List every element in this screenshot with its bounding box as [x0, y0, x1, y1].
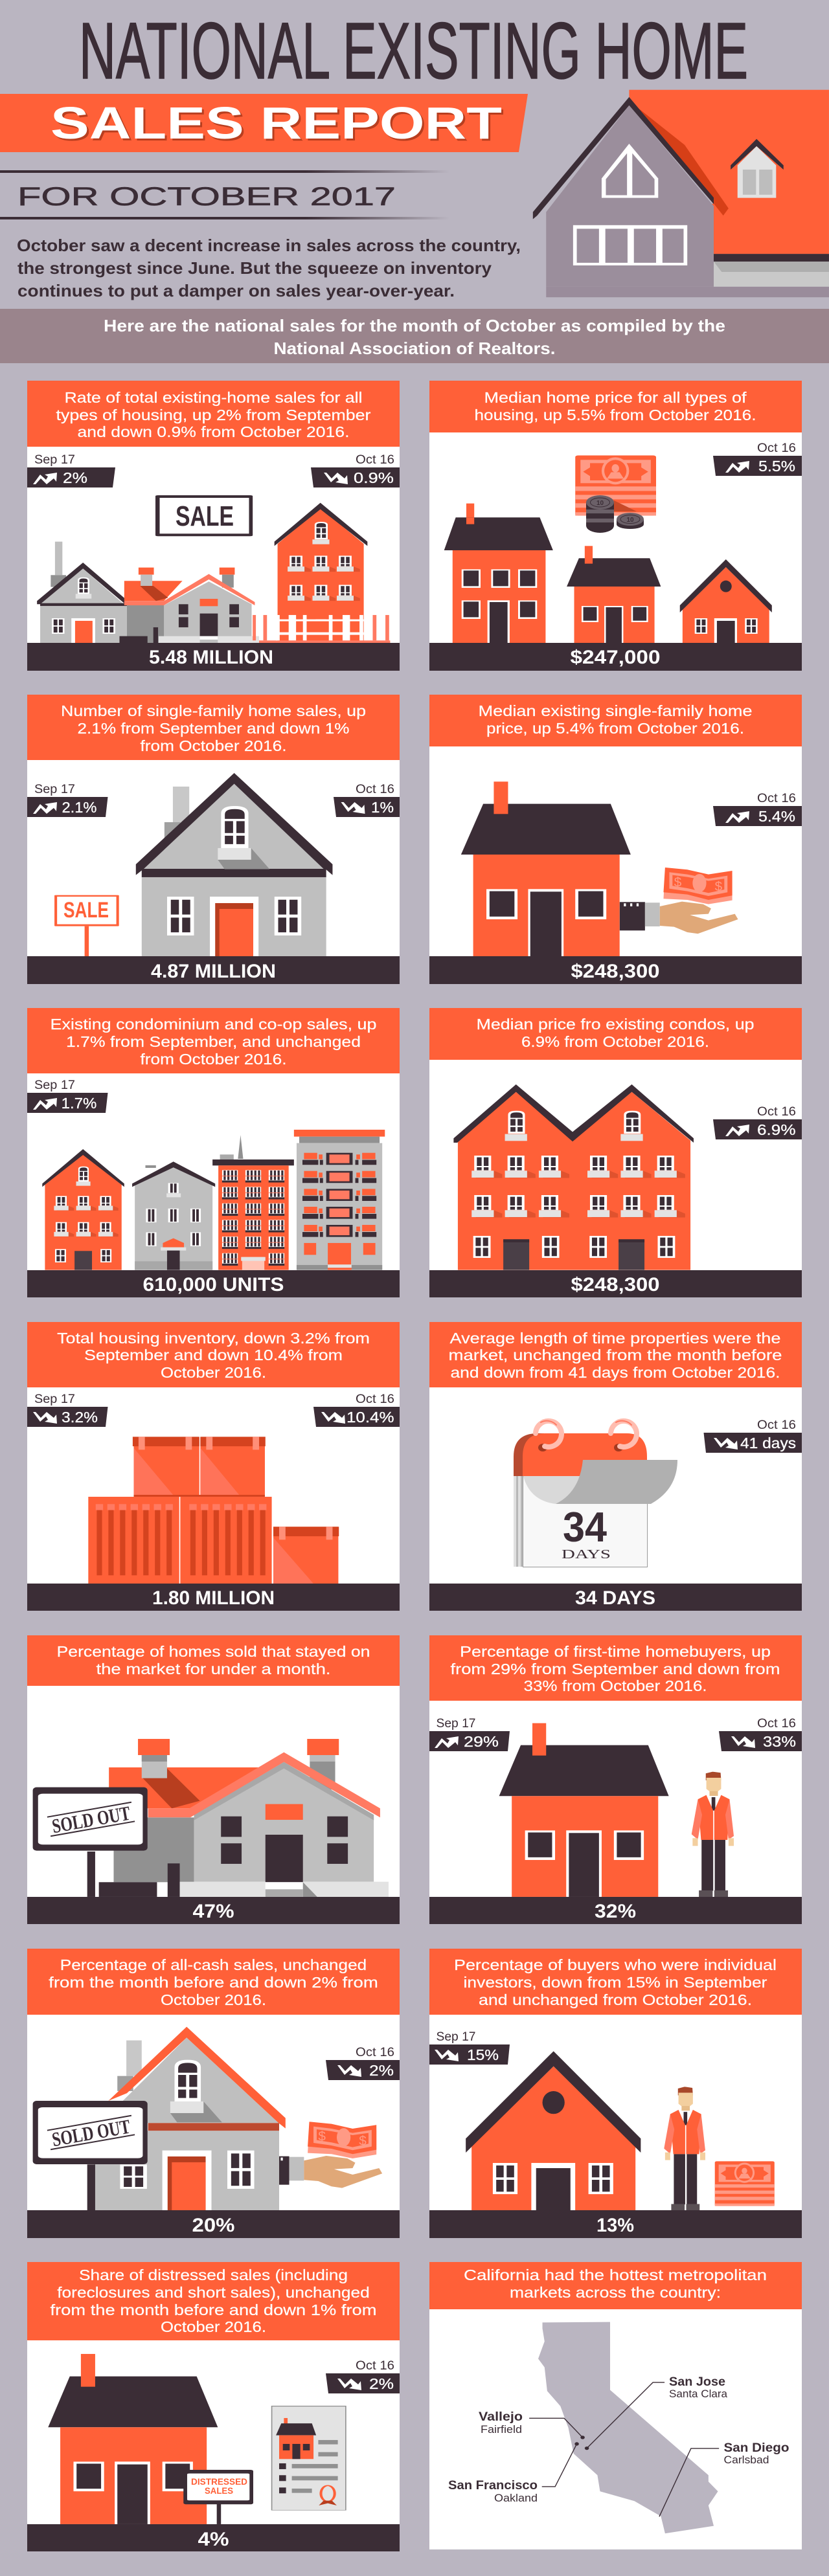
illustration: sold house and cash — [33, 2027, 382, 2211]
panel heading — [27, 695, 400, 760]
value bar: $247,000 — [570, 647, 661, 668]
panel heading: California had the hottest metropolitan — [464, 2267, 767, 2283]
value bar — [27, 2524, 400, 2551]
badge: Oct 16 down 2% — [326, 2046, 400, 2080]
badge: Sep 17 up 2%: Sep 17 — [34, 453, 75, 467]
badge: Sep 17 up 1.7%: 1.7% — [62, 1095, 97, 1112]
badge: Sep 17 down 3.2% — [27, 1393, 108, 1427]
panel heading — [27, 2262, 400, 2340]
panel: median home price — [429, 381, 802, 671]
map label: San Diego: Carlsbad — [724, 2454, 769, 2466]
panel heading — [429, 1008, 802, 1060]
intro band: National Association of Realtors. — [273, 339, 556, 358]
badge: Oct 16 down 33%: Oct 16 — [757, 1717, 796, 1730]
badge: Sep 17 down 3.2%: Sep 17 — [34, 1393, 75, 1406]
panel heading: Number of single-family home sales, up — [61, 702, 366, 719]
badge: Oct 16 up 6.9%: Oct 16 — [757, 1105, 796, 1119]
intro paragraph: continues to put a damper on sales year-over-year. — [17, 281, 455, 300]
badge: Sep 17 down 15%: 15% — [467, 2046, 499, 2063]
map label: Vallejo: Fairfield — [481, 2423, 522, 2436]
sign text: distressed sales: SALES — [205, 2485, 233, 2496]
panel heading: September and down 10.4% from — [84, 1347, 343, 1363]
intro paragraph: the strongest since June. But the squeeze on inventory — [17, 258, 492, 278]
map label: San Diego: San Diego — [724, 2441, 789, 2455]
panel heading: from October 2016. — [140, 1051, 286, 1068]
panel heading: Existing condominium and co-op sales, up — [51, 1016, 377, 1033]
panel heading: price, up 5.4% from October 2016. — [486, 720, 744, 737]
value bar — [429, 956, 802, 984]
badge: Oct 16 down 41 days — [703, 1418, 802, 1453]
value bar — [27, 643, 400, 671]
panel: total housing inventory — [27, 1322, 400, 1611]
panel: median condo price — [429, 1008, 802, 1297]
value bar: 47% — [193, 1901, 234, 1922]
panel heading: October 2016. — [161, 1364, 266, 1381]
illustration: house with sold out sign — [33, 1739, 389, 1897]
panel heading: October 2016. — [161, 2318, 266, 2335]
panel heading — [27, 1949, 400, 2015]
badge: Oct 16 down 33% — [719, 1717, 802, 1751]
panel heading: October 2016. — [161, 1991, 266, 2008]
panel heading: Percentage of homes sold that stayed on — [57, 1643, 370, 1660]
badge: Oct 16 down 41 days: 41 days — [740, 1435, 796, 1451]
panel: total existing-home sales — [27, 381, 400, 671]
panel heading: from October 2016. — [140, 737, 286, 754]
panel heading: and unchanged from October 2016. — [479, 1991, 752, 2008]
value bar: 610,000 UNITS — [142, 1274, 284, 1295]
panel heading: 2.1% from September and down 1% — [78, 720, 350, 737]
illustration: twin-gabled condo — [453, 1084, 694, 1270]
illustration: grey house with sale sign — [54, 773, 332, 956]
value bar: 34 DAYS — [575, 1587, 655, 1609]
badge: Oct 16 up 5.5%: Oct 16 — [757, 442, 796, 455]
map label: San Jose: San Jose — [669, 2375, 725, 2389]
panel heading — [27, 1008, 400, 1073]
sign text: sale: SALE — [63, 898, 109, 923]
panel heading: Total housing inventory, down 3.2% from — [57, 1330, 370, 1347]
illustration: stacked crates — [88, 1437, 339, 1584]
value bar: 13% — [596, 2215, 634, 2236]
panel heading: Percentage of first-time homebuyers, up — [460, 1643, 771, 1660]
value bar: 20% — [192, 2215, 234, 2236]
value bar — [27, 2210, 400, 2238]
panel heading: Median home price for all types of — [484, 389, 747, 406]
panel: all-cash sales — [27, 1949, 400, 2238]
illustration: three houses and money — [444, 455, 772, 643]
value bar — [429, 1584, 802, 1611]
value bar: $248,300 — [571, 961, 659, 982]
value bar: 5.48 MILLION — [149, 647, 273, 668]
sign text: sold out: SOLD OUT — [50, 1802, 132, 1837]
badge: Sep 17 up 29% — [429, 1717, 510, 1751]
panel heading: and down 0.9% from October 2016. — [78, 423, 350, 440]
badge: Sep 17 up 2.1%: Sep 17 — [34, 783, 75, 796]
icon: coins: 10 — [596, 500, 604, 507]
panel heading — [429, 695, 802, 746]
illustration: house, distressed sign and document — [48, 2354, 346, 2524]
badge: Sep 17 up 29%: Sep 17 — [437, 1717, 475, 1730]
badge: Oct 16 down 33%: 33% — [763, 1733, 796, 1750]
panel heading: investors, down from 15% in September — [464, 1974, 767, 1991]
panel heading — [27, 381, 400, 447]
panel: median single-family price — [429, 695, 802, 984]
value bar — [429, 643, 802, 671]
badge: Oct 16 up 6.9%: 6.9% — [757, 1121, 796, 1138]
badge: Oct 16 down 2%: Oct 16 — [356, 2359, 394, 2373]
subtitle: for October 2017 — [0, 170, 449, 219]
badge: Sep 17 up 2.1% — [27, 783, 108, 817]
intro paragraph: October saw a decent increase in sales across the country, — [17, 236, 521, 255]
subtitle: for October 2017: FOR OCTOBER 2017 — [17, 183, 396, 211]
badge: Oct 16 down 10.4%: Oct 16 — [356, 1393, 394, 1406]
panel heading: Median price fro existing condos, up — [477, 1016, 754, 1033]
panel: single-family home sales — [27, 695, 400, 984]
value bar — [27, 1270, 400, 1297]
value bar — [27, 956, 400, 984]
intro band — [0, 309, 829, 363]
panel heading: Percentage of buyers who were individual — [454, 1956, 777, 1973]
panel: homes sold under a month — [27, 1635, 400, 1924]
badge: Oct 16 down 0.9% — [311, 453, 400, 487]
panel heading: Rate of total existing-home sales for all — [65, 389, 363, 406]
panel heading: from the month before and down 2% from — [49, 1974, 378, 1991]
intro paragraph — [17, 236, 521, 300]
value bar — [27, 1897, 400, 1924]
badge: Sep 17 up 2% — [27, 453, 115, 487]
badge: Oct 16 down 1%: 1% — [371, 799, 394, 816]
banner: sales report — [0, 94, 528, 152]
badge: Sep 17 up 2%: 2% — [63, 469, 87, 486]
badge: Oct 16 down 2%: 2% — [369, 2375, 394, 2392]
value bar: $248,300 — [571, 1274, 659, 1295]
badge: Oct 16 down 1% — [334, 783, 400, 817]
badge: Oct 16 up 5.4% — [713, 792, 802, 826]
value bar: 4% — [198, 2529, 229, 2550]
map label: San Francisco: San Francisco — [448, 2479, 538, 2492]
panel heading: Percentage of all-cash sales, unchanged — [60, 1956, 367, 1973]
panel heading — [27, 1635, 400, 1686]
badge: Oct 16 down 1%: Oct 16 — [356, 783, 394, 796]
illustration: row of houses — [37, 495, 390, 643]
icon: coins — [586, 495, 644, 533]
badge: Oct 16 down 0.9%: Oct 16 — [356, 453, 394, 467]
panel heading: 6.9% from October 2016. — [521, 1033, 709, 1050]
panel heading: 1.7% from September, and unchanged — [66, 1033, 361, 1050]
panel heading: 33% from October 2016. — [523, 1677, 707, 1694]
panel heading — [429, 1949, 802, 2015]
badge: Sep 17 down 15% — [429, 2030, 510, 2065]
badge: Oct 16 up 5.5%: 5.5% — [758, 458, 795, 475]
sign text: distressed sales — [191, 2476, 247, 2496]
panel heading — [429, 1635, 802, 1701]
value bar — [27, 1584, 400, 1611]
map label: San Jose — [669, 2375, 728, 2400]
badge: Sep 17 up 1.7% — [27, 1079, 108, 1113]
panel heading: the market for under a month. — [96, 1661, 330, 1677]
value bar: 1.80 MILLION — [152, 1587, 275, 1609]
header section — [0, 7, 829, 363]
badge: Oct 16 down 2%: Oct 16 — [356, 2046, 394, 2059]
badge: Oct 16 up 5.5% — [713, 442, 802, 476]
panel: condo and co-op sales — [27, 1008, 400, 1297]
badge: Sep 17 up 1.7%: Sep 17 — [34, 1079, 75, 1092]
map label: San Francisco — [448, 2479, 538, 2504]
panel heading: Average length of time properties were the — [449, 1330, 781, 1347]
panel heading: housing, up 5.5% from October 2016. — [474, 407, 756, 423]
map label: San Francisco: Oakland — [494, 2492, 538, 2504]
panel heading: markets across the country: — [510, 2284, 721, 2301]
panel heading: market, unchanged from the month before — [448, 1347, 782, 1363]
sign text: sold out: SOLD OUT — [50, 2115, 132, 2151]
badge: Sep 17 down 15%: Sep 17 — [437, 2030, 475, 2044]
banner: sales report: SALES REPORT — [51, 98, 502, 148]
badge: Oct 16 up 5.4%: 5.4% — [758, 808, 795, 825]
sign text: sale: SALE — [176, 500, 234, 532]
intro band: Here are the national sales for the month of October as compiled by the — [104, 316, 725, 335]
illustration: condo buildings — [42, 1130, 385, 1270]
panel heading: from 29% from September and down from — [451, 1661, 780, 1677]
illustration: house, investor and cash — [466, 2051, 775, 2211]
value bar: 4.87 MILLION — [151, 961, 276, 982]
illustration: hero house — [533, 90, 829, 297]
value bar — [429, 1897, 802, 1924]
value bar: 32% — [595, 1901, 636, 1922]
badge: Oct 16 down 0.9%: 0.9% — [354, 469, 394, 486]
illustration: calendar: 34 — [563, 1503, 607, 1551]
illustration: calendar — [514, 1421, 677, 1567]
panel heading — [429, 1322, 802, 1387]
panel: California metropolitan markets — [429, 2262, 802, 2549]
illustration: house and buyer — [499, 1723, 734, 1898]
panel: individual investors — [429, 1949, 802, 2238]
badge: Oct 16 down 2% — [326, 2359, 400, 2393]
panel heading — [429, 2262, 802, 2309]
panel heading: foreclosures and short sales), unchanged — [57, 2284, 370, 2301]
map label: San Jose: Santa Clara — [669, 2388, 728, 2400]
sign text: distressed sales: DISTRESSED — [191, 2476, 247, 2487]
badge: Sep 17 down 3.2%: 3.2% — [62, 1409, 98, 1426]
badge: Oct 16 down 10.4% — [313, 1393, 400, 1427]
panel heading: types of housing, up 2% from September — [56, 407, 371, 423]
illustration: house and hand with cash — [461, 781, 738, 956]
panel: first-time homebuyers — [429, 1635, 802, 1924]
panel heading — [429, 381, 802, 432]
badge: Oct 16 down 41 days: Oct 16 — [757, 1418, 796, 1432]
badge: Oct 16 up 5.4%: Oct 16 — [757, 792, 796, 805]
map label: Vallejo: Vallejo — [479, 2410, 523, 2424]
panel: distressed sales — [27, 2262, 400, 2551]
panel heading: and down from 41 days from October 2016. — [451, 1364, 780, 1381]
value bar — [429, 1270, 802, 1297]
value bar — [429, 2210, 802, 2238]
panel heading: Share of distressed sales (including — [79, 2267, 348, 2283]
badge: Oct 16 down 10.4%: 10.4% — [346, 1409, 394, 1426]
badge: Oct 16 up 6.9% — [713, 1105, 802, 1139]
badge: Oct 16 down 2%: 2% — [369, 2062, 394, 2079]
badge: Sep 17 up 29%: 29% — [464, 1733, 499, 1750]
map label: Vallejo — [479, 2410, 523, 2436]
panel: average days on market — [429, 1322, 802, 1611]
badge: Sep 17 up 2.1%: 2.1% — [62, 799, 97, 816]
panel heading: Median existing single-family home — [478, 702, 753, 719]
illustration: calendar: DAYS — [562, 1547, 611, 1562]
icon: coins: 10 — [626, 517, 634, 524]
map: California — [529, 2322, 719, 2533]
panel heading — [27, 1322, 400, 1387]
panel heading: from the month before and down 1% from — [51, 2302, 377, 2318]
map label: San Diego — [724, 2441, 789, 2466]
